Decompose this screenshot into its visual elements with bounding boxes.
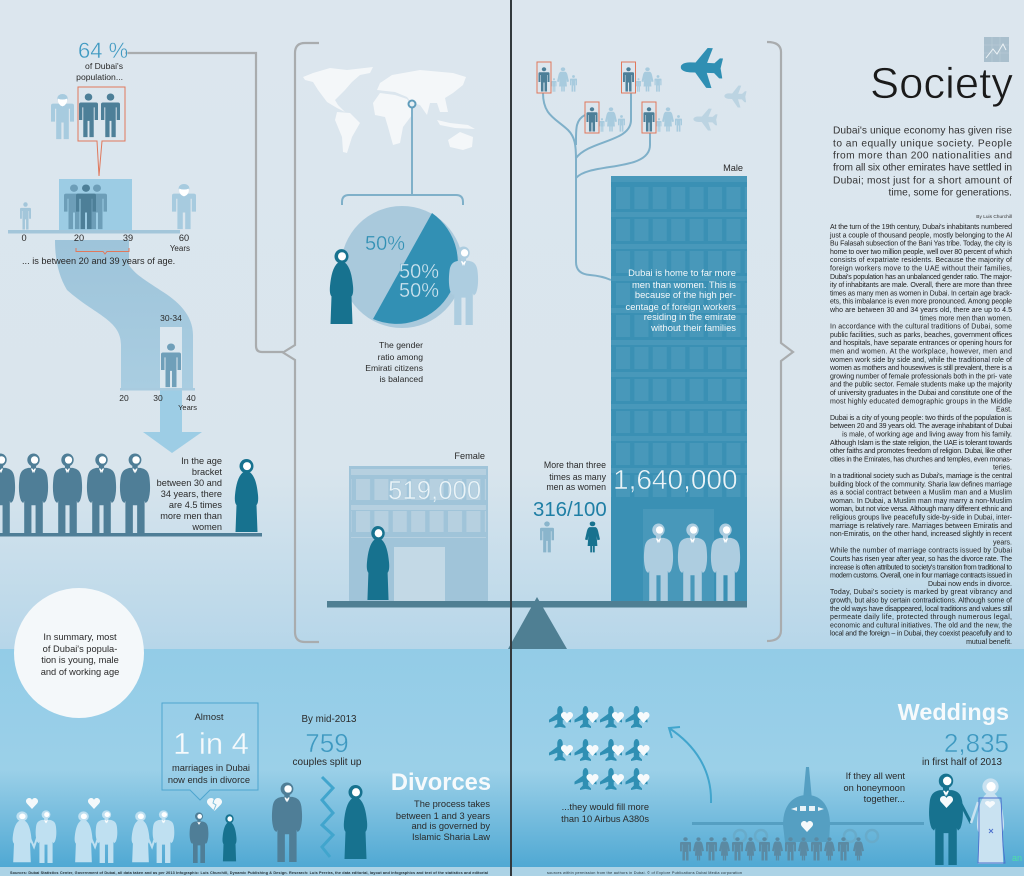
text: divorce process: Islamic Sharia Law (412, 832, 490, 842)
caption: between 20 and 39: ... is between 20 and 39 years of age. (22, 256, 175, 266)
paragraph: divorce: Dubai now ends in divorce. (928, 581, 1012, 588)
caption: gender ratio: is balanced (380, 374, 423, 384)
intro paragraph: time, some for generations. (889, 188, 1012, 198)
icon: pale airplane upper (724, 85, 747, 108)
couple 1 (13, 810, 56, 863)
caption: gender ratio: The gender (379, 340, 423, 350)
axis unit: Years (170, 244, 190, 253)
callout: 1 in 4: Almost (194, 712, 224, 723)
paragraph: today: permeate daily life, protected through numerous legal, (830, 614, 1012, 621)
intro paragraph: Dubai; most just for a short amount of (833, 176, 1012, 186)
intro paragraph: Dubai's unique economy has given rise (833, 126, 1012, 136)
value: 2835: 2,835 (944, 728, 1009, 758)
paragraph: marriage (829, 473, 1013, 546)
value: female population: 519,000 (388, 477, 481, 505)
sources footer left: Sources: Dubai Statistics Center, Government of Dubai, all data taken and as per 2013 Infographic: Luis Churchill, Dynamic Publishing & Design. Research: Luis Pereira, the data editorial, layout and infographics and text of the statistics and editorial (10, 871, 488, 875)
paragraph: today: local and the foreign – in Dubai, they coexist peacefully and to (830, 631, 1012, 638)
caption: of Dubai's population: population... (76, 72, 123, 82)
pie label: 50 percent twice: 50% (399, 261, 439, 283)
caption: three times: times as many (549, 472, 607, 482)
bride (971, 778, 1004, 864)
paragraph: cultural traditions: East. (996, 407, 1012, 414)
pie label: 50 percent: 50% (365, 233, 405, 255)
divorces panel (13, 703, 491, 863)
statistic: 759 couples: couples split up (293, 757, 362, 768)
footer band (0, 867, 1024, 876)
intro paragraph: from all six other emirates have settled in (833, 162, 1012, 174)
background (0, 0, 1024, 650)
intro paragraph: from more than 200 nationalities and (833, 150, 1012, 162)
paragraph: today: Today, Dubai's society is marked by great vibrancy and (830, 589, 1012, 596)
paragraph: turn of the century: Bu Falasah subsection of the Bani Yas tribe. Today, the city is (830, 241, 1012, 248)
zigzag divide (322, 777, 333, 857)
family 1 (537, 62, 577, 93)
caption: 4.5 times: In the age (181, 456, 222, 466)
paragraph: marriage: building block of the community. Sharia law defines marriage (830, 481, 1012, 488)
scale beam (327, 601, 747, 608)
down arrow (143, 390, 202, 453)
family 4 (642, 102, 682, 133)
family 2 (622, 62, 662, 93)
selection outline on bride (978, 798, 1005, 863)
left curly bracket (283, 43, 319, 642)
paragraph: cultural traditions: and hospitals, have separate entrances or opening hours for (830, 340, 1013, 347)
paragraph: divorce: increase is often attributed to society's transition from traditional to (830, 564, 1012, 571)
caption: A380s: than 10 Airbus A380s (561, 814, 649, 824)
connector from map to pie (342, 108, 463, 205)
caption: 4.5 times: 34 years, there (161, 489, 222, 499)
heart 1 (26, 798, 38, 809)
icon: chart (984, 37, 1009, 62)
axis labels: 20 (119, 393, 129, 403)
paragraph: today: the old ways have disappeared, local traditions and values still (830, 606, 1012, 613)
title: Society (870, 60, 1013, 108)
caption: gender ratio: ratio among (378, 352, 423, 362)
paragraph: marriage: woman, but not vice versa. Although many different ethnic and (829, 506, 1012, 513)
pie label: 50 percent twice: 50% (399, 280, 439, 302)
family 3 (585, 102, 625, 133)
woman (235, 459, 258, 532)
age bracket 30 to 34 panel (119, 313, 202, 453)
scale fulcrum (508, 597, 567, 649)
statistic: 759 couples: 759 (305, 728, 349, 758)
paragraph: turn of the century: foreign workers move to the UAE without their families, (830, 266, 1012, 272)
intro paragraph (833, 126, 1012, 198)
caption: honeymoon: together... (864, 794, 905, 804)
statistic: 759 couples (293, 714, 362, 768)
paragraph: today: growth, but also by certain contradictions. Although some of (830, 598, 1012, 604)
caption: three times: More than three (544, 460, 606, 470)
value: male population: 1,640,000 (613, 464, 738, 495)
groom (929, 774, 971, 865)
paragraph: marriage: as a social contract between a Muslim man and a Muslim (830, 490, 1012, 497)
callout: 1 in 4: marriages in Dubai (172, 763, 250, 773)
caption: 4.5 times: are 4.5 times (169, 500, 222, 510)
caption: three times: men as women (546, 482, 606, 492)
stray green label: an (1012, 853, 1022, 863)
foreign workers families panel (537, 47, 747, 280)
intro paragraph: to an equally unique society. People (833, 138, 1012, 150)
society article (829, 37, 1013, 646)
paragraph: divorce: Courts has risen year after year, so has the divorce rate. The (830, 556, 1012, 563)
row of men and one woman (0, 454, 262, 536)
paragraph: cultural traditions: public facilities, such as parks, beaches, government offices (830, 332, 1012, 339)
paragraph: turn of the century: who are between 30 and 34 years old, there are up to 4.5 (829, 307, 1012, 314)
text: divorce process: and is governed by (411, 821, 490, 831)
icon: child (20, 202, 31, 229)
callout: 1 in 4: 1 in 4 (173, 726, 249, 761)
axis labels: 60 (179, 233, 189, 243)
paragraph: turn of the century: just a couple of thousand people, mostly belonging to the Al (829, 232, 1012, 239)
migration curves (543, 93, 650, 280)
heading: 64 percent: 64 % (78, 38, 128, 63)
paragraph: marriage: religious groups live peacefully side-by-side in Dubai, inter- (830, 514, 1013, 522)
paragraph: turn of the century: At the turn of the 19th century, Dubai's inhabitants numbered (830, 224, 1012, 231)
paragraph: turn of the century: ity of inhabitants are male. Overall, there are more than three (830, 282, 1012, 289)
sources footer right: sources within permission from the authors in Dubai. © of Explore Publications Dubai Media corporation (547, 871, 742, 875)
paragraph: today: mutual benefit. (966, 639, 1012, 646)
summary text: of Dubai's popula- (43, 644, 117, 654)
connector line from 64 percent to bracket (125, 53, 283, 352)
paragraph: marriage: In a traditional society such as Dubai's, marriage is the central (830, 473, 1012, 480)
axis labels: 40 (186, 393, 196, 403)
text: divorce process: The process takes (414, 799, 490, 809)
summary text: In summary, most (43, 632, 117, 642)
statistic: 759 couples: By mid-2013 (302, 714, 357, 725)
paragraph: today: economic and cultural initiatives. The old and the new, the (830, 622, 1012, 629)
paragraph: cultural traditions: women as mothers and housewives is still prevalent, there is a (829, 365, 1012, 372)
woman (367, 526, 389, 600)
map location marker (408, 100, 416, 108)
callout: 1 in 4: now ends in divorce (168, 775, 250, 785)
label: female: Female (454, 451, 485, 461)
icon: elderly man (172, 184, 196, 229)
icon: small man (540, 521, 554, 552)
right curly bracket (767, 42, 793, 641)
callout: orange selection box (78, 87, 125, 176)
caption: honeymoon: If they all went (846, 771, 905, 781)
summary text: and of working age (41, 667, 119, 677)
paragraph: marriage: non-Emiratis, on the other hand, increased slightly in recent (830, 531, 1012, 538)
caption: first half: in first half of 2013 (922, 757, 1003, 768)
summary text: tion is young, male (41, 655, 119, 665)
paragraph: cultural traditions: and the public sector. Female students make up the majority (830, 382, 1012, 389)
heart 2 (88, 798, 100, 809)
paragraph: cultural traditions (829, 324, 1013, 414)
text in male building: without their families (650, 322, 736, 333)
caption: 4.5 times: between 30 and (157, 478, 222, 488)
paragraph: young people: is male, of working age and living away from his family. (842, 432, 1012, 438)
caption: honeymoon: on honeymoon (843, 783, 905, 793)
paragraph: divorce: While the number of marriage contracts issued by Dubai (830, 548, 1012, 555)
weddings panel (549, 699, 1022, 865)
scale with population buildings (327, 163, 747, 649)
large man (272, 783, 302, 862)
paragraph: young people: cities in the Emirates, has churches and temples, even monas- (830, 456, 1013, 463)
axis labels: 39 (123, 233, 133, 243)
female building (349, 466, 488, 601)
male building (611, 176, 747, 601)
axis labels: 30 (153, 393, 163, 403)
paragraph: marriage: years. (993, 539, 1012, 546)
age axis (8, 230, 180, 234)
men (0, 454, 150, 533)
man (449, 247, 478, 325)
label 30-34: 30-34 (160, 313, 182, 323)
axis labels: 20 (74, 233, 84, 243)
paragraph: divorce (830, 548, 1012, 588)
caption: gender ratio: Emirati citizens (365, 363, 423, 373)
paragraph: young people: Although Islam is the state religion, the UAE is tolerant towards (830, 440, 1012, 447)
text in male building: residing in the emirate (644, 311, 736, 322)
broken heart (207, 798, 222, 811)
world map (303, 67, 475, 153)
axis (120, 388, 195, 390)
paragraph: cultural traditions: In accordance with the cultural traditions of Dubai, some (830, 324, 1012, 331)
caption: 4.5 times: more men than (160, 511, 222, 521)
caption: A380s: ...they would fill more (562, 802, 649, 812)
caption: of Dubai's population: of Dubai's (85, 61, 123, 71)
icon: pale airplane lower (693, 108, 718, 131)
heading: weddings: Weddings (898, 699, 1009, 725)
label: male: Male (723, 163, 743, 173)
age band 20 to 39 (59, 179, 132, 231)
text in male building: Dubai is home to far more (628, 267, 736, 278)
icon: three men in band (64, 184, 107, 229)
front view airplane (692, 767, 924, 842)
text: divorce process: between 1 and 3 years (396, 811, 490, 821)
paragraph: cultural traditions: of university graduates in the Dubai and constitute one of the (830, 390, 1012, 397)
highlighted column (160, 327, 182, 388)
paragraph: cultural traditions: growing number of female professionals both in the pri- vate (830, 373, 1012, 380)
paragraph: young people: teries. (993, 465, 1012, 472)
paragraph: turn of the century: times more men than women. (920, 315, 1012, 322)
planes with hearts grid (549, 706, 650, 790)
paragraph: young people: between 20 and 39 years old. The average inhabitant of Dubai (830, 423, 1012, 430)
paragraph: today (830, 589, 1012, 646)
woman (330, 249, 353, 324)
paragraph: young people: other faiths and promotes freedom of religion. Dubai, like other (830, 448, 1013, 455)
paragraph: turn of the century (829, 224, 1013, 322)
paragraph: marriage: woman. In Dubai, a Muslim man may marry a non-Muslim (829, 498, 1012, 505)
icon: large airplane (680, 47, 723, 88)
paragraph: marriage: marriage is relatively rare. Marriages between Emiratis and (830, 523, 1012, 530)
divorcing man (190, 812, 208, 863)
text in male building: because of the high per- (635, 289, 736, 300)
ratio 316 per 100: 316/100 (533, 499, 607, 521)
curved arrow (669, 727, 711, 803)
paragraph: turn of the century: Dubai's population has an unbalanced gender ratio. The major- (830, 274, 1013, 281)
white disc (14, 588, 144, 718)
age statistic panel (8, 38, 196, 253)
axis unit: Years (178, 403, 197, 412)
axis labels: 0 (21, 233, 27, 243)
summary circle (14, 588, 144, 718)
text in male building: men than women. This is (632, 279, 736, 290)
divorcing woman (222, 814, 237, 861)
couple 3 (132, 810, 174, 863)
paragraph: turn of the century: home to over two million people, well over 80 percent of which (830, 249, 1012, 256)
gender ratio panel (303, 67, 478, 384)
paragraph: cultural traditions: men and women. At the workplace, however, men and (830, 348, 1012, 356)
icon: small woman (585, 521, 600, 552)
text in male building: centage of foreign workers (626, 301, 736, 312)
paragraph: turn of the century: times as many men as women in Dubai. In certain age brack- (830, 290, 1013, 297)
icon: man in column (161, 343, 181, 387)
paragraph: cultural traditions: most highly educated demographic groups in the Middle (830, 398, 1012, 405)
couple 2 (75, 810, 117, 863)
ground line (0, 533, 262, 536)
bottom panel background (0, 649, 1024, 868)
caption: 4.5 times: women (191, 522, 222, 532)
caption: 4.5 times: bracket (192, 467, 222, 477)
paragraph: turn of the century: consists of expatriate residents. Because the majority of (830, 257, 1012, 264)
paragraph: cultural traditions: women work side by side and, while the traditional role of (829, 357, 1012, 364)
flow band from 20-39 to 30-34 (55, 240, 193, 388)
paragraph: young people: Dubai is a city of young people: two thirds of the population is (830, 415, 1012, 422)
byline: By Luis Churchill (976, 214, 1012, 220)
paragraph: turn of the century: ets, this imbalance is even more pronounced. Among people (830, 299, 1012, 306)
three men (644, 524, 740, 603)
paragraph: divorce: modern customs. Overall, one in four marriage contracts issued in (830, 573, 1012, 580)
icon: old man (51, 94, 74, 139)
large woman (344, 785, 367, 859)
pie chart (341, 206, 463, 328)
callout: 1 in 4 (162, 703, 258, 800)
queue of people (680, 837, 864, 861)
bracket: 20 to 39 (76, 248, 129, 254)
paragraph: young people (830, 415, 1013, 472)
centre fold line (510, 0, 512, 876)
icon: two working-age men (79, 93, 120, 137)
heading: divorces: Divorces (391, 770, 491, 796)
